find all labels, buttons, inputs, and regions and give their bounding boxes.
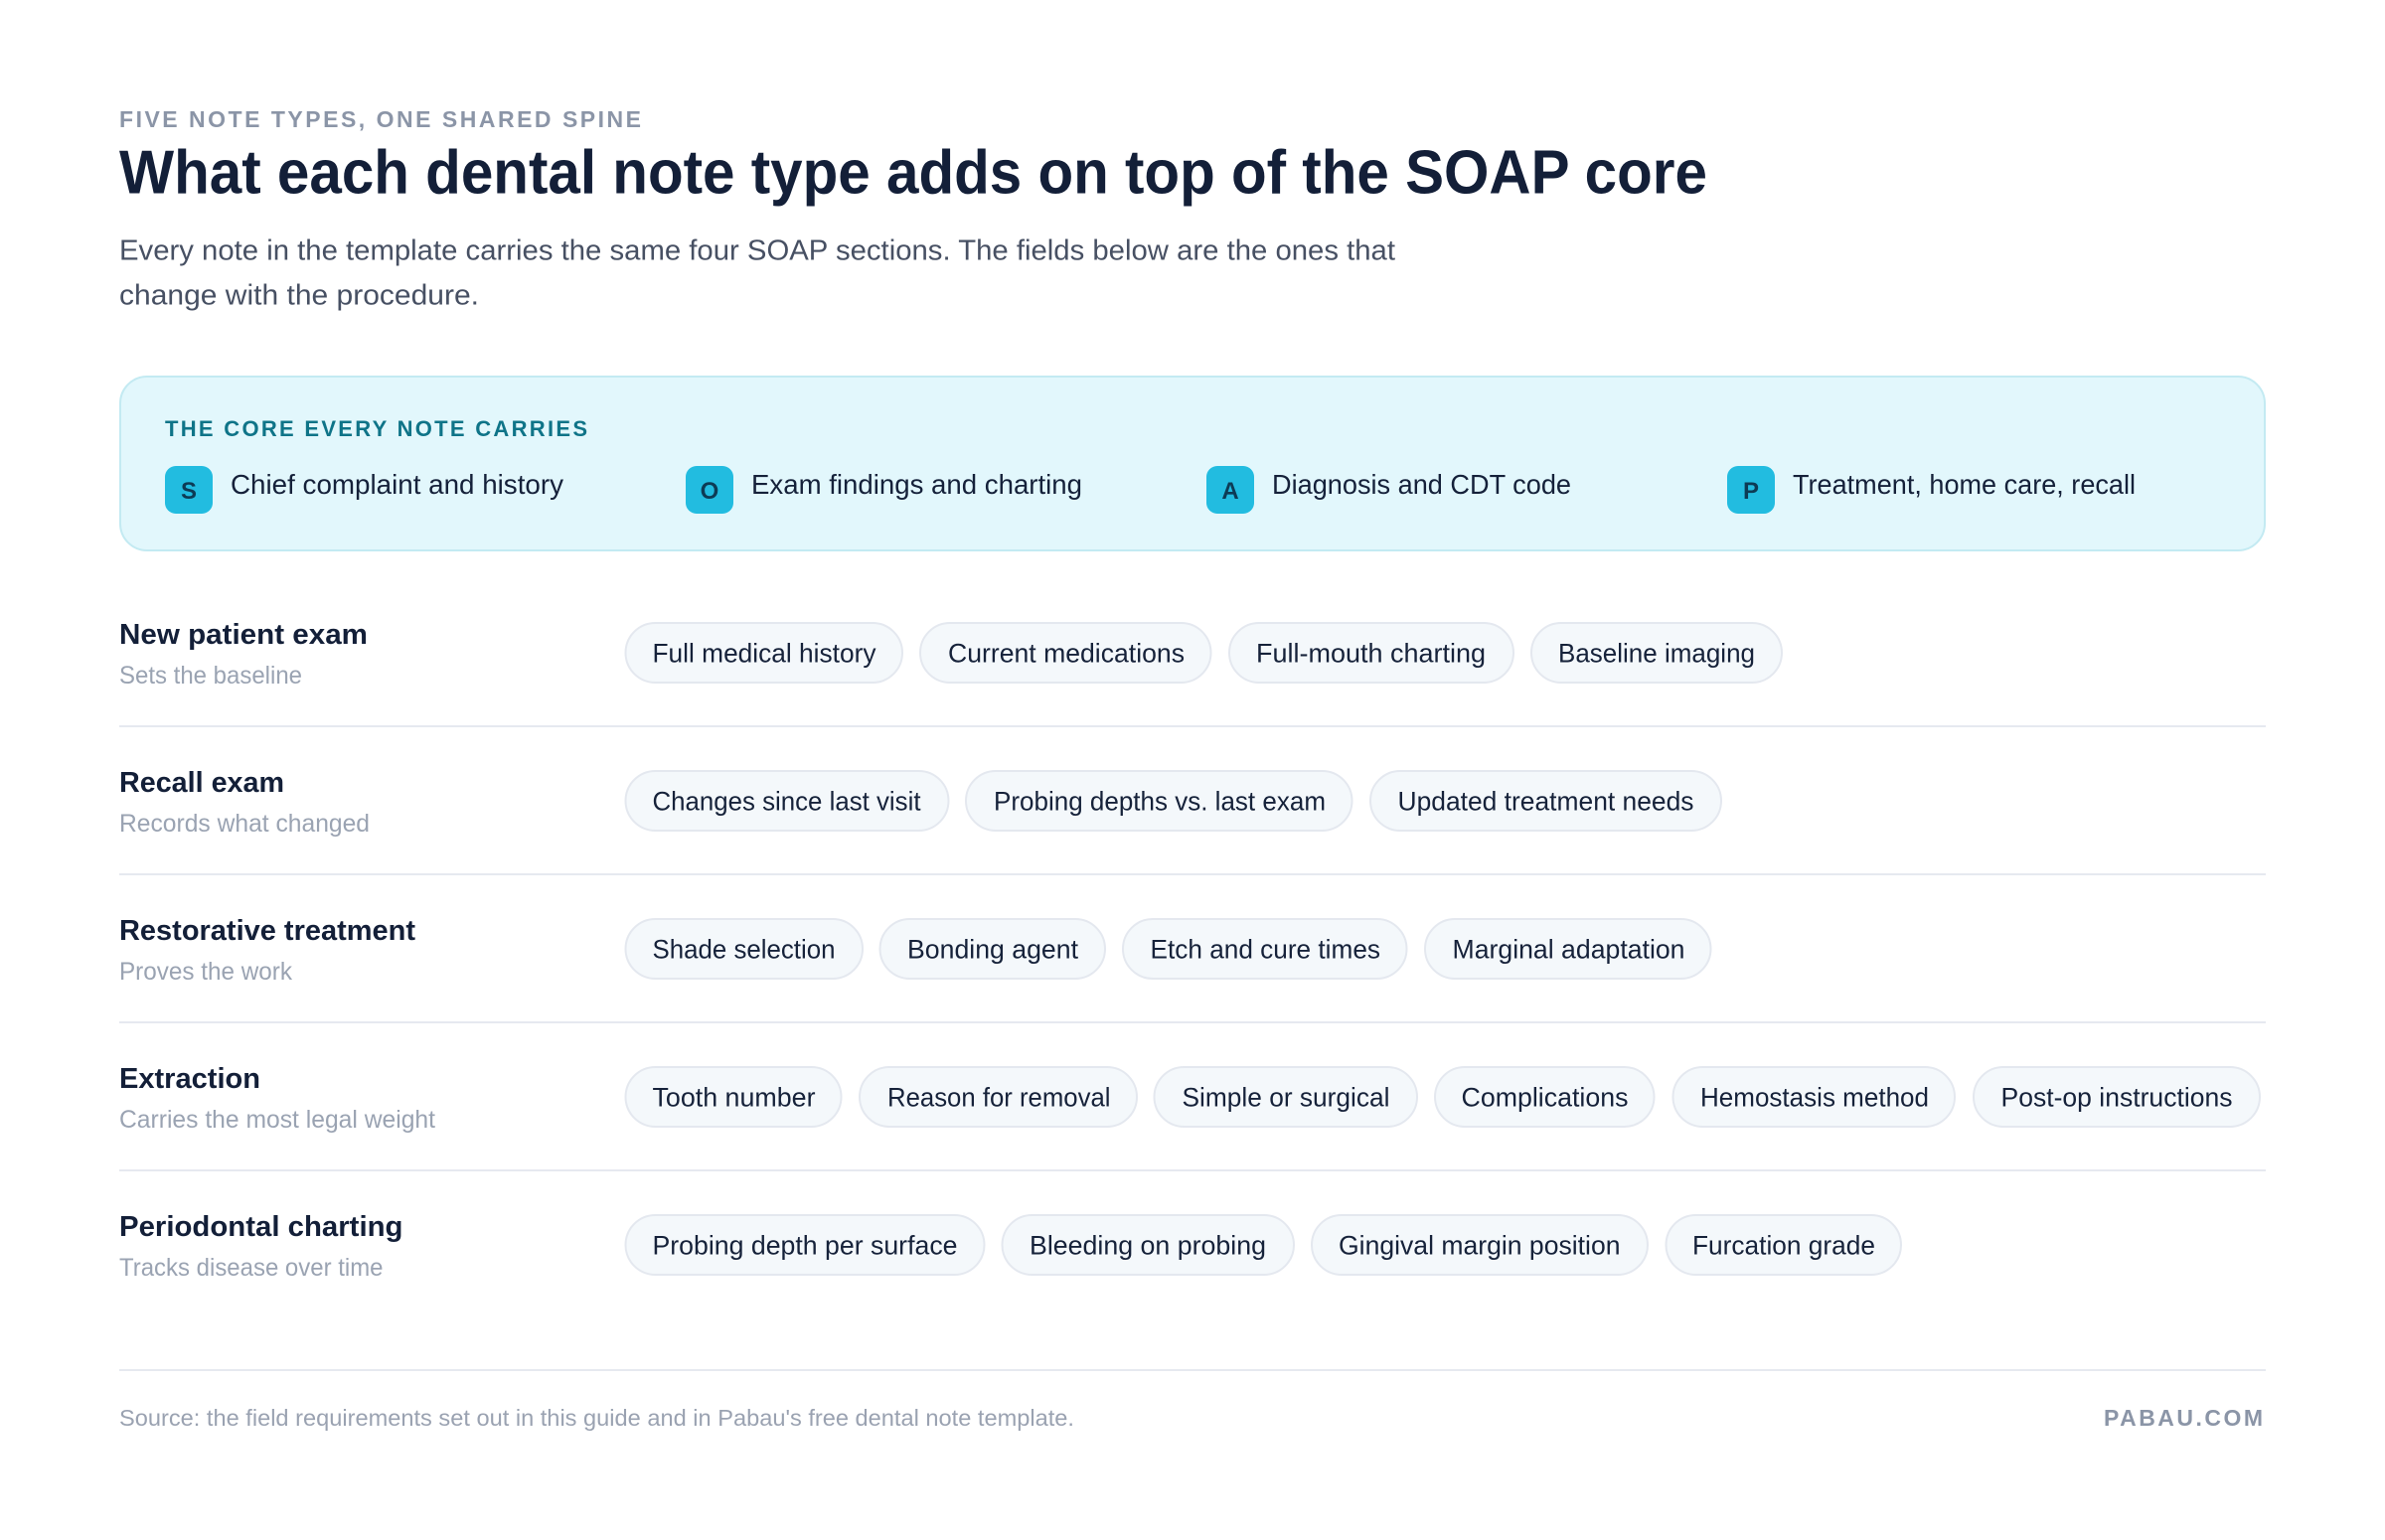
chip — [1123, 919, 1407, 979]
chip — [1673, 1067, 1955, 1127]
chip: Bonding agent — [907, 934, 1079, 964]
chip: Probing depth per surface — [652, 1230, 958, 1260]
chip: Current medications — [948, 638, 1185, 668]
chip: Full medical history — [652, 638, 876, 668]
row: Extraction — [119, 1063, 2260, 1134]
chip: Updated treatment needs — [1397, 787, 1693, 817]
row heading — [119, 619, 368, 690]
row heading: Periodontal charting — [119, 1211, 403, 1243]
chip — [626, 623, 902, 683]
chip: Changes since last visit — [652, 787, 921, 817]
row heading — [119, 915, 415, 986]
row heading: Restorative treatment — [119, 915, 415, 947]
SOAP item: S: S — [181, 478, 197, 505]
chip: Hemostasis method — [1700, 1083, 1929, 1113]
chip — [1425, 919, 1711, 979]
panel: SOAP core — [120, 377, 2265, 550]
SOAP item: A: A — [1221, 478, 1239, 505]
row: New patient exam — [119, 619, 1782, 690]
chip: Furcation grade — [1692, 1230, 1875, 1260]
SOAP item: A: Diagnosis and CDT code — [1272, 469, 1571, 500]
chip: Reason for removal — [887, 1083, 1111, 1113]
chip — [626, 1067, 841, 1127]
chip: Tooth number — [652, 1083, 816, 1113]
chip: Full-mouth charting — [1256, 638, 1486, 668]
row heading: Tracks disease over time — [119, 1254, 384, 1282]
SOAP item: A — [1206, 466, 1571, 514]
SOAP item: S — [165, 466, 563, 514]
SOAP item: P — [1727, 466, 2136, 514]
chip — [860, 1067, 1137, 1127]
brand: PABAU.COM — [2104, 1405, 2263, 1431]
row: Restorative treatment — [119, 915, 1711, 986]
row heading: New patient exam — [119, 619, 368, 651]
chip: Probing depths vs. last exam — [994, 787, 1326, 817]
row heading: Extraction — [119, 1063, 260, 1095]
SOAP item: O: Exam findings and charting — [751, 469, 1082, 500]
chip — [1666, 1215, 1901, 1275]
row heading — [119, 1211, 403, 1282]
title: What each dental note type adds on top of the SOAP core — [119, 139, 1707, 207]
chip — [1974, 1067, 2260, 1127]
chip — [626, 919, 863, 979]
row heading: Proves the work — [119, 958, 292, 986]
chip — [626, 771, 948, 831]
source note: Source: the field requirements set out in this guide and in Pabau's free dental note template. — [119, 1405, 1074, 1431]
eyebrow: FIVE NOTE TYPES, ONE SHARED SPINE — [119, 106, 641, 132]
chip: Bleeding on probing — [1030, 1230, 1266, 1260]
chip — [1370, 771, 1721, 831]
chip — [1155, 1067, 1417, 1127]
chip: Marginal adaptation — [1453, 934, 1685, 964]
chip: Complications — [1461, 1083, 1628, 1113]
chip: Etch and cure times — [1151, 934, 1380, 964]
SOAP item: S: Chief complaint and history — [231, 469, 563, 500]
SOAP item: O — [686, 466, 1082, 514]
chip: Baseline imaging — [1558, 638, 1755, 668]
chip — [966, 771, 1352, 831]
chip — [1531, 623, 1782, 683]
row heading: Carries the most legal weight — [119, 1106, 435, 1134]
chip: Gingival margin position — [1339, 1230, 1620, 1260]
chip: Shade selection — [652, 934, 835, 964]
subtitle: change with the procedure. — [119, 280, 479, 312]
chip — [626, 1215, 984, 1275]
chip — [880, 919, 1105, 979]
chip — [1312, 1215, 1648, 1275]
row heading: Records what changed — [119, 810, 370, 838]
subtitle: Every note in the template carries the same four SOAP sections. The fields below are the ones that — [119, 234, 1395, 266]
row heading — [119, 1063, 435, 1134]
chip — [920, 623, 1210, 683]
chip — [1435, 1067, 1654, 1127]
row heading — [119, 767, 370, 838]
chip: Post-op instructions — [2001, 1083, 2232, 1113]
row heading: Sets the baseline — [119, 662, 302, 690]
SOAP item: O: O — [701, 478, 718, 505]
row: Recall exam — [119, 767, 1721, 838]
chip: Simple or surgical — [1183, 1083, 1389, 1113]
chip — [1002, 1215, 1294, 1275]
SOAP item: P: Treatment, home care, recall — [1793, 469, 2136, 500]
SOAP item: P: P — [1743, 478, 1759, 505]
subtitle — [119, 234, 1395, 312]
panel heading: THE CORE EVERY NOTE CARRIES — [165, 416, 587, 441]
row: Periodontal charting — [119, 1211, 1901, 1282]
chip — [1229, 623, 1513, 683]
row heading: Recall exam — [119, 767, 284, 799]
